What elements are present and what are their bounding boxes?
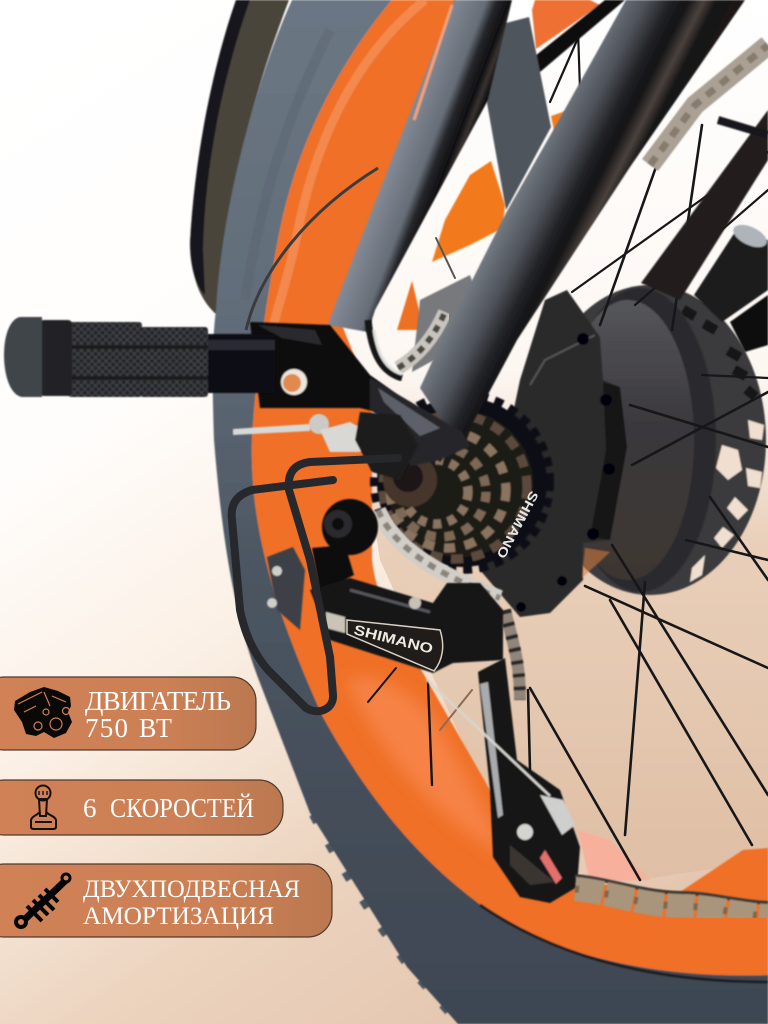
tyre edge line	[480, 905, 768, 982]
far rim	[432, 161, 505, 262]
label: suspension: ДВУХПОДВЕСНАЯ	[83, 876, 300, 903]
cassette	[374, 394, 550, 570]
wheel interior backdrop	[340, 0, 768, 880]
cross tube	[530, 0, 625, 72]
brake cable	[246, 168, 378, 330]
right stay	[420, 0, 745, 445]
fender	[190, 0, 289, 315]
rear derailleur	[267, 499, 503, 673]
footpeg collar	[40, 320, 72, 396]
spec badge: suspension: АМОРТИЗАЦИЯ	[83, 903, 274, 930]
spec badge: speeds: СКОРОСТЕЙ	[110, 793, 254, 823]
left stay	[328, 0, 512, 332]
footpeg tube	[205, 334, 275, 393]
icon: shock absorber	[16, 874, 70, 927]
spec badge: engine: 750	[85, 713, 128, 743]
spec badge: speeds	[0, 780, 283, 835]
cover bolts	[516, 333, 615, 612]
seat stays	[328, 0, 745, 445]
rim highlight	[272, 0, 425, 330]
disc rotor	[412, 275, 766, 595]
rear wheel	[190, 0, 768, 1024]
derailleur body	[310, 578, 503, 673]
footpeg grip	[68, 322, 142, 397]
badge background	[0, 780, 283, 835]
tyre tread lugs	[312, 815, 458, 1024]
tyre	[213, 0, 768, 1024]
badge background	[0, 864, 332, 937]
cage window	[510, 845, 555, 885]
derailleur badge	[347, 620, 443, 671]
mount plate	[267, 547, 305, 630]
rear chain stay top right	[641, 45, 768, 352]
rim cut-out glow	[578, 830, 650, 882]
derailleur badge: SHIMANO	[352, 621, 435, 657]
motor cover	[480, 290, 627, 617]
large black sprocket	[377, 397, 547, 567]
spec badge: engine: ВТ	[139, 713, 172, 743]
spec badge: engine	[0, 677, 256, 750]
upper chain behind stay	[368, 312, 445, 378]
icon: engine	[14, 687, 72, 738]
rim	[252, 0, 768, 975]
footpeg end cap	[4, 317, 42, 397]
badge background	[0, 677, 256, 750]
lower chain	[575, 876, 768, 916]
lower cage	[427, 658, 580, 903]
dropout plate	[370, 378, 470, 466]
sprocket teeth	[383, 415, 527, 559]
label: speeds: 6	[83, 793, 96, 823]
footpeg	[4, 317, 275, 397]
cable	[427, 680, 550, 796]
hub motor	[480, 288, 716, 617]
axle hardware	[233, 412, 418, 480]
icon: gear shifter	[31, 786, 56, 829]
tyre shaded groove	[245, 30, 330, 300]
spec badge: suspension	[0, 864, 332, 937]
derailleur pulley mount	[322, 499, 378, 555]
label: engine: ДВИГАТЕЛЬ	[85, 686, 231, 716]
rim lit zone	[345, 677, 510, 860]
footpeg bracket	[250, 322, 470, 466]
derailleur guard	[232, 458, 398, 711]
rotor holes	[690, 420, 764, 582]
gusset	[487, 17, 551, 210]
chain around cassette	[378, 510, 520, 700]
upper chain	[650, 45, 768, 165]
cassette brand text: SHIMANO	[494, 489, 542, 561]
spokes	[368, 30, 768, 880]
